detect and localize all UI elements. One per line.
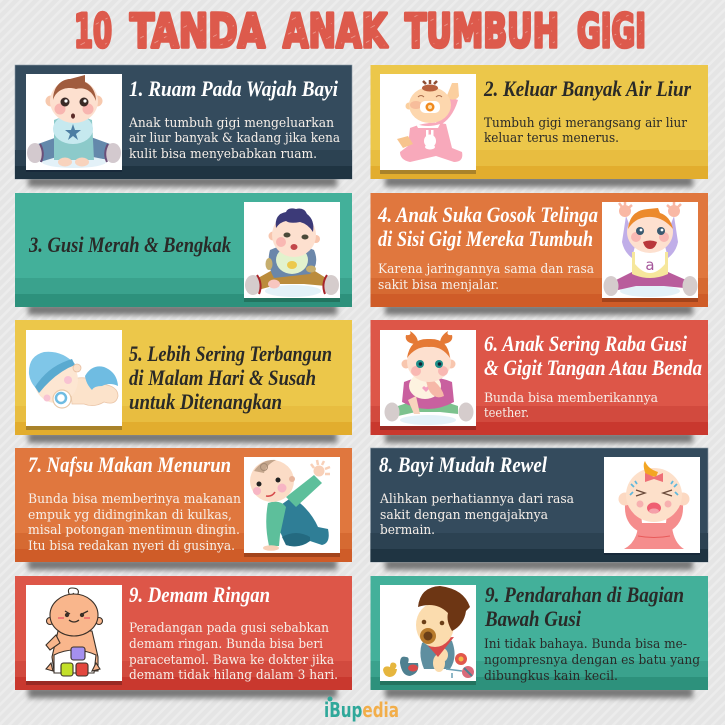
icon: crawling baby waving <box>250 460 330 551</box>
icon: baby with star bib <box>27 75 121 168</box>
icon: baby with pacifier <box>397 80 462 162</box>
heading <box>377 202 598 251</box>
heading: 9. Demam Ringan <box>129 582 270 607</box>
body text: air liur banyak & kadang jika kena <box>129 131 340 146</box>
body text: empuk yg didinginkan di kulkas, <box>28 508 232 523</box>
icon: sleeping baby <box>29 352 118 408</box>
panel 7: nafsu makan menurun <box>15 448 352 570</box>
body text <box>378 262 594 293</box>
panel 2: keluar banyak air liur <box>370 65 708 187</box>
heading <box>484 582 684 631</box>
body text: Itu bisa redakan nyeri di gusinya. <box>28 539 235 554</box>
heading: 3. Gusi Merah & Bengkak <box>28 232 231 257</box>
heading: Bawah Gusi <box>484 606 582 631</box>
heading: 5. Lebih Sering Terbangun <box>129 341 332 366</box>
body text <box>128 116 340 162</box>
body text: ngompresnya dengan es batu yang <box>484 653 701 668</box>
title: GIGI <box>577 4 646 58</box>
panel 3: gusi merah dan bengkak <box>15 193 352 315</box>
icon: baby touching ears <box>604 202 698 297</box>
heading: 1. Ruam Pada Wajah Bayi <box>129 76 339 101</box>
body text <box>129 621 338 683</box>
panel 6: raba gusi <box>370 320 708 443</box>
body text: misal potongan mentimun dingin. <box>28 523 240 538</box>
heading: 9. Pendarahan di Bagian <box>485 582 684 607</box>
title <box>74 4 646 58</box>
body text: Bunda bisa memberinya makanan <box>28 492 241 507</box>
body text <box>28 492 241 554</box>
panel 1: ruam pada wajah bayi <box>15 65 352 187</box>
body text: Ini tidak bahaya. Bunda bisa me- <box>484 637 687 652</box>
body text: Anak tumbuh gigi mengeluarkan <box>128 116 334 131</box>
body text: Alihkan perhatiannya dari rasa <box>379 492 574 507</box>
body text: keluar terus menerus. <box>484 131 619 146</box>
body text: demam ringan. Bunda bisa beri <box>129 637 323 652</box>
heading <box>129 341 332 414</box>
heading: 2. Keluar Banyak Air Liur <box>483 76 691 101</box>
icon: baby with blocks <box>46 588 102 676</box>
body text <box>484 391 658 421</box>
panel 10: pendarahan bawah gusi <box>370 576 708 698</box>
heading: 6. Anak Sering Raba Gusi <box>484 331 688 356</box>
body text <box>484 637 701 684</box>
title: 10 <box>74 4 112 58</box>
body text: Bunda bisa memberikannya <box>484 391 658 406</box>
icon: crying baby <box>618 461 690 549</box>
heading: di Sisi Gigi Mereka Tumbuh <box>378 226 593 251</box>
title: TUMBUH <box>405 4 559 58</box>
body text: Peradangan pada gusi sebabkan <box>129 621 329 636</box>
icon: baby biting hand <box>384 331 474 425</box>
heading: di Malam Hari & Susah <box>129 365 316 390</box>
body text: teether. <box>484 406 529 421</box>
icon: tired baby <box>245 208 339 297</box>
body text <box>484 116 688 146</box>
title: ANAK <box>283 4 389 58</box>
panel 4: gosok telinga <box>370 193 708 315</box>
panel 8: bayi mudah rewel <box>370 448 708 570</box>
heading: 8. Bayi Mudah Rewel <box>379 452 548 477</box>
logo: iBupedia: iBupedia <box>324 698 399 722</box>
panel 5: sering terbangun <box>15 320 352 443</box>
heading: untuk Ditenangkan <box>129 389 282 414</box>
body text: sakit dengan mengajaknya <box>380 508 548 523</box>
body text: dibungkus kain kecil. <box>484 669 618 684</box>
heading: 4. Anak Suka Gosok Telinga <box>377 202 598 227</box>
title: TANDA <box>130 4 265 58</box>
heading <box>484 331 702 380</box>
body text: Karena jaringannya sama dan rasa <box>378 262 594 277</box>
body text: bermain. <box>380 523 435 538</box>
body text: Tumbuh gigi merangsang air liur <box>484 116 688 131</box>
body text: kulit bisa menyebabkan ruam. <box>129 147 317 162</box>
heading: 7. Nafsu Makan Menurun <box>28 452 231 477</box>
body text <box>379 492 574 538</box>
panel 9: demam ringan <box>15 576 352 698</box>
body text: demam tidak hilang dalam 3 hari. <box>129 668 338 683</box>
icon: baby touching ears: a <box>645 256 655 274</box>
body text: sakit bisa menjalar. <box>378 278 499 293</box>
body text: paracetamol. Bawa ke dokter jika <box>129 653 334 668</box>
icon: baby with toys <box>383 586 474 678</box>
